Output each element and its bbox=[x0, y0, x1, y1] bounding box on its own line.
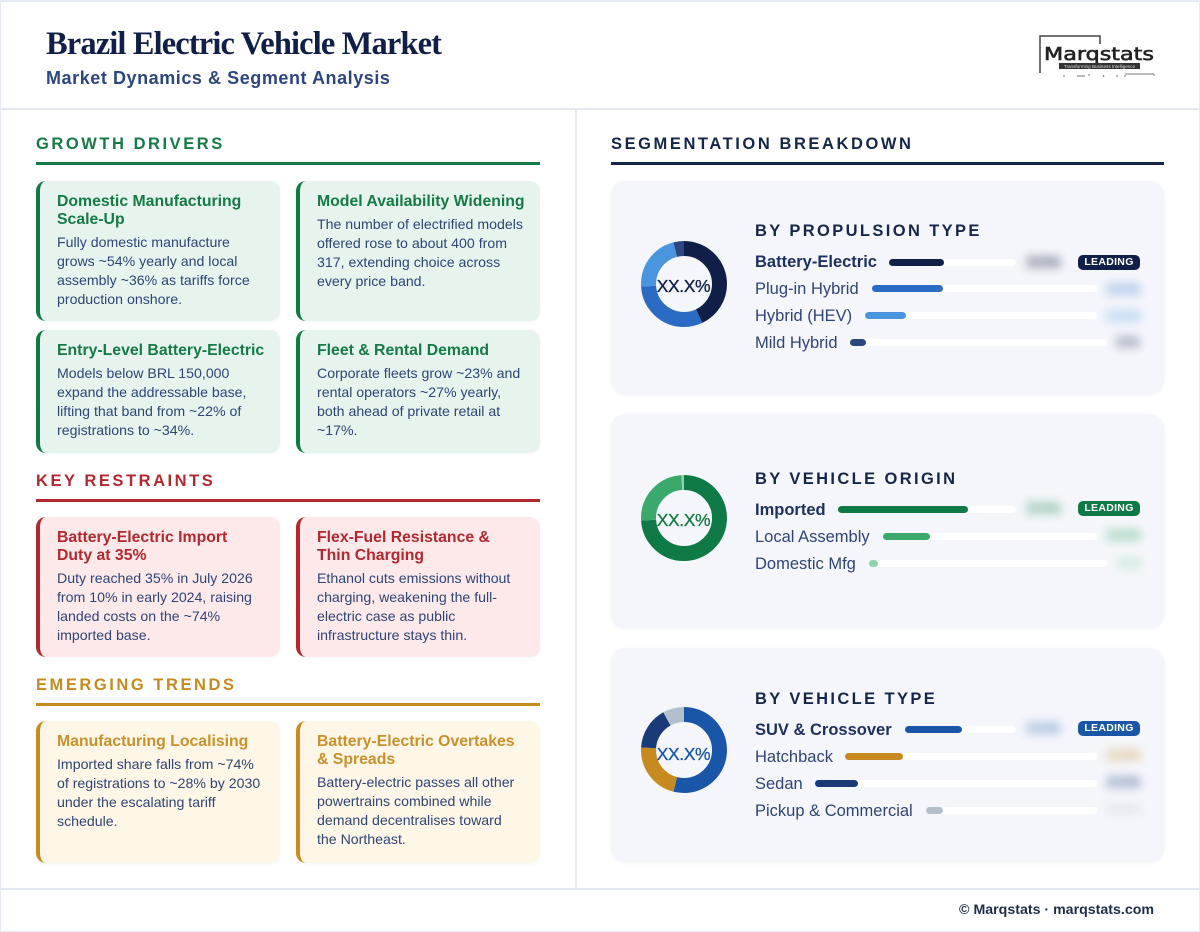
card: manufacturing localising: of registrations to ~28% by 2030 bbox=[57, 775, 260, 791]
bar: hatchback bbox=[845, 753, 1097, 760]
row: hatchback: Hatchback bbox=[755, 748, 833, 766]
card: fleet and rental: both ahead of private retail at bbox=[317, 403, 500, 419]
donut: propulsion bbox=[641, 241, 727, 327]
row: mild hybrid: Mild Hybrid bbox=[755, 334, 838, 352]
footer text: © Marqstats · marqstats.com bbox=[959, 902, 1154, 918]
value: XX% bbox=[1107, 308, 1140, 325]
card: flex fuel: Flex-Fuel Resistance & bbox=[317, 529, 490, 546]
badge: LEADING bbox=[1084, 502, 1134, 514]
card: battery electric overtakes bbox=[296, 721, 540, 863]
card: flex fuel: electric case as public bbox=[317, 608, 455, 624]
value: XX% bbox=[1107, 801, 1140, 818]
card: entry-level: registrations to ~34%. bbox=[57, 422, 194, 438]
heading: type: BY VEHICLE TYPE bbox=[755, 690, 937, 708]
logo: Transforming Business Intelligence bbox=[1064, 64, 1136, 69]
bar: sedan bbox=[815, 780, 1097, 787]
panel: by propulsion type bbox=[611, 181, 1164, 394]
card: import duty bbox=[36, 517, 280, 657]
card: fleet and rental: ~17%. bbox=[317, 422, 358, 438]
value: XX% bbox=[1107, 774, 1140, 791]
badge bbox=[1078, 255, 1140, 270]
bar: battery-electric bbox=[889, 259, 1016, 266]
card: model availability: offered rose to about 400 from bbox=[317, 235, 507, 251]
card: import duty: imported base. bbox=[57, 627, 151, 643]
card: manufacturing localising: Imported share falls from ~74% bbox=[57, 756, 254, 772]
value: X% bbox=[1118, 555, 1141, 572]
logo bbox=[1039, 35, 1154, 78]
donut: origin bbox=[641, 475, 727, 561]
card: manufacturing localising bbox=[36, 721, 280, 863]
row: imported: Imported bbox=[755, 501, 826, 519]
panel: key restraints bbox=[36, 472, 540, 502]
badge bbox=[1078, 721, 1140, 736]
card: domestic manufacturing bbox=[36, 181, 280, 321]
bar: mild bbox=[850, 339, 1107, 346]
card: entry-level: expand the addressable base, bbox=[57, 384, 246, 400]
card: battery electric overtakes: Battery-Electric Overtakes bbox=[317, 733, 515, 750]
card: fleet and rental bbox=[296, 330, 540, 453]
card: domestic manufacturing: Fully domestic manufacture bbox=[57, 234, 230, 250]
value: XX% bbox=[1107, 527, 1140, 544]
bar: local bbox=[883, 533, 1097, 540]
card: flex fuel: Thin Charging bbox=[317, 547, 424, 564]
card: model availability: 317, extending choice across bbox=[317, 254, 500, 270]
card: flex fuel bbox=[296, 517, 540, 657]
heading: emerging trends: EMERGING TRENDS bbox=[36, 676, 237, 694]
subtitle: Market Dynamics & Segment Analysis bbox=[46, 68, 390, 88]
donut value: XX.X% bbox=[657, 276, 710, 296]
badge: LEADING bbox=[1084, 722, 1134, 734]
card: battery electric overtakes: powertrains combined while bbox=[317, 793, 492, 809]
card: import duty: landed costs on the ~74% bbox=[57, 608, 220, 624]
row: plug-in hybrid: Plug-in Hybrid bbox=[755, 280, 859, 298]
row: domestic: Domestic Mfg bbox=[755, 555, 856, 573]
footer rule bbox=[0, 888, 1200, 890]
logo: Marqstats bbox=[1044, 44, 1154, 65]
row: local assembly: Local Assembly bbox=[755, 528, 870, 546]
card: entry-level: Entry-Level Battery-Electric bbox=[57, 342, 264, 359]
donut value: XX.X% bbox=[657, 510, 710, 530]
card: domestic manufacturing: production onshore. bbox=[57, 291, 182, 307]
value: XX% bbox=[1107, 281, 1140, 298]
donut: type bbox=[641, 707, 727, 793]
card: domestic manufacturing: grows ~54% yearly and local bbox=[57, 253, 237, 269]
card: domestic manufacturing: Scale-Up bbox=[57, 211, 125, 228]
bar: suv bbox=[905, 726, 1016, 733]
card: model availability: every price band. bbox=[317, 273, 425, 289]
card: domestic manufacturing: assembly ~36% as tariffs force bbox=[57, 272, 250, 288]
row: suv: SUV & Crossover bbox=[755, 721, 892, 739]
badge: LEADING bbox=[1084, 256, 1134, 268]
card: fleet and rental: Fleet & Rental Demand bbox=[317, 342, 489, 359]
card: manufacturing localising: schedule. bbox=[57, 813, 118, 829]
card: model availability: The number of electrified models bbox=[317, 216, 523, 232]
panel: emerging trends bbox=[36, 676, 540, 706]
panel: growth drivers bbox=[36, 135, 540, 165]
card: flex fuel: infrastructure stays thin. bbox=[317, 627, 467, 643]
card: flex fuel: charging, weakening the full- bbox=[317, 589, 497, 605]
value: X% bbox=[1116, 334, 1139, 351]
heading: growth drivers: GROWTH DRIVERS bbox=[36, 135, 225, 153]
card: model availability bbox=[296, 181, 540, 321]
card: import duty: Duty reached 35% in July 2026 bbox=[57, 570, 253, 586]
card: domestic manufacturing: Domestic Manufacturing bbox=[57, 193, 241, 210]
card: fleet and rental: rental operators ~27% yearly, bbox=[317, 384, 501, 400]
card: import duty: Battery-Electric Import bbox=[57, 529, 227, 546]
donut value: XX.X% bbox=[657, 744, 710, 764]
card: manufacturing localising: under the escalating tariff bbox=[57, 794, 216, 810]
heading: key restraints: KEY RESTRAINTS bbox=[36, 472, 215, 490]
bar: plug-in bbox=[872, 285, 1097, 292]
row: sedan: Sedan bbox=[755, 775, 803, 793]
panel: by vehicle type bbox=[611, 648, 1164, 862]
heading: propulsion: BY PROPULSION TYPE bbox=[755, 222, 982, 240]
card: battery electric overtakes: demand decentralises toward bbox=[317, 812, 502, 828]
card: battery electric overtakes: & Spreads bbox=[317, 751, 395, 768]
badge bbox=[1078, 501, 1140, 516]
card: entry-level: lifting that band from ~22% of bbox=[57, 403, 241, 419]
card: entry-level: Models below BRL 150,000 bbox=[57, 364, 229, 380]
bar: hybrid bbox=[865, 312, 1097, 319]
panel: by vehicle origin bbox=[611, 414, 1164, 628]
heading: origin: BY VEHICLE ORIGIN bbox=[755, 470, 957, 488]
rule bbox=[611, 162, 1164, 165]
card: entry-level bbox=[36, 330, 280, 453]
bar: domestic bbox=[869, 560, 1107, 567]
rule bbox=[36, 162, 540, 165]
card: battery electric overtakes: the Northeast. bbox=[317, 831, 406, 847]
value: XX% bbox=[1027, 500, 1060, 517]
value: XX% bbox=[1027, 720, 1060, 737]
row: battery-electric: Battery-Electric bbox=[755, 253, 877, 271]
rule bbox=[36, 499, 540, 502]
card: model availability: Model Availability Widening bbox=[317, 193, 525, 210]
title: Brazil Electric Vehicle Market bbox=[46, 26, 441, 62]
heading: segmentation breakdown: SEGMENTATION BREAKDOWN bbox=[611, 135, 914, 153]
card: flex fuel: Ethanol cuts emissions without bbox=[317, 570, 510, 586]
card: import duty: from 10% in early 2024, raising bbox=[57, 589, 252, 605]
value: XX% bbox=[1107, 747, 1140, 764]
rule bbox=[36, 703, 540, 706]
card: battery electric overtakes: Battery-electric passes all other bbox=[317, 774, 514, 790]
card: import duty: Duty at 35% bbox=[57, 547, 147, 564]
row: hybrid: Hybrid (HEV) bbox=[755, 307, 852, 325]
row: pickup: Pickup & Commercial bbox=[755, 802, 913, 820]
card: fleet and rental: Corporate fleets grow ~23% and bbox=[317, 364, 520, 380]
column divider bbox=[575, 110, 577, 888]
value: XX% bbox=[1027, 254, 1060, 271]
header bbox=[0, 0, 1200, 110]
bar: pickup bbox=[926, 807, 1097, 814]
bar: imported bbox=[838, 506, 1016, 513]
card: manufacturing localising: Manufacturing Localising bbox=[57, 733, 248, 750]
